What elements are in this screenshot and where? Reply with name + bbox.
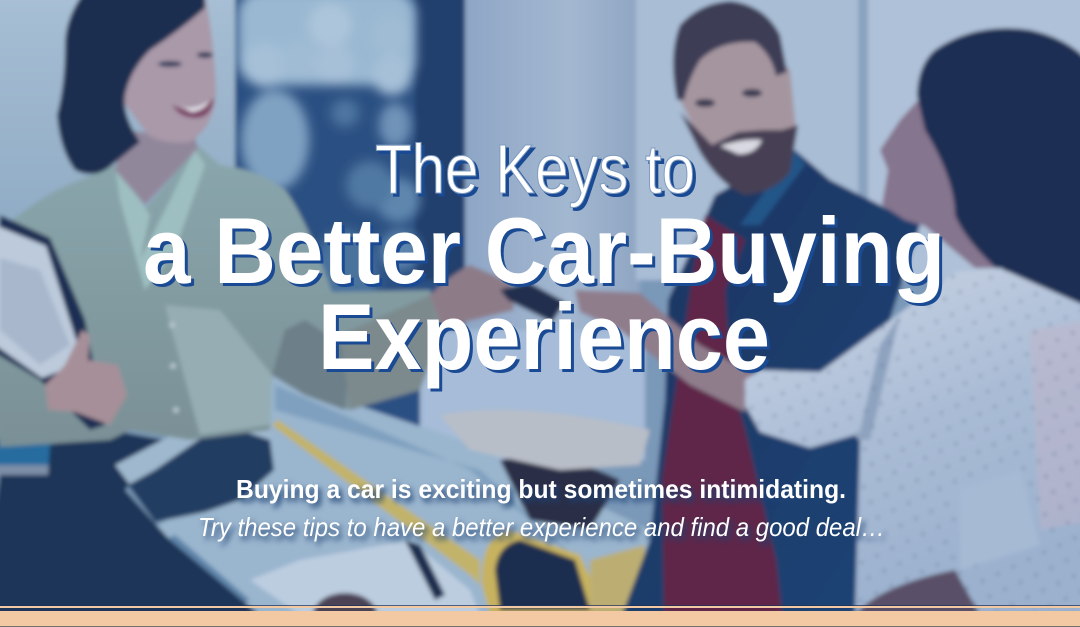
man: collar [740,150,805,225]
bottom peach band [0,605,1080,627]
background: bokeh lights [238,0,420,330]
clipboard [0,215,105,430]
right woman: curly hair [917,28,1080,320]
left woman: hair [57,0,205,174]
car: yellow door and window [440,410,650,615]
left woman: hand on clipboard [45,330,127,425]
right woman: dotted white blouse [745,268,1080,615]
title line 3: Experience: Experience [318,284,770,389]
left woman: dark lower body [0,415,274,615]
subtitle bold line: Buying a car is exciting but sometimes intimidating. [236,474,846,504]
title line 1: The Keys to: The Keys to [375,130,695,208]
subtitle italic line: Try these tips to have a better experience and find a good deal… [198,512,885,542]
title [143,130,945,389]
man: face, hair and beard [673,1,798,195]
title line 2: a Better Car-Buying: a Better Car-Buying [143,198,945,303]
man: red shirt [662,215,782,615]
right woman: face [880,98,995,268]
man: jacket [622,150,920,615]
left woman: neck and face [115,0,216,205]
car: hood [150,375,650,627]
left woman: shirt [0,145,443,447]
dark strip at lower left [0,438,100,475]
handshake: woman's hand and key fob [430,265,565,330]
right woman: arm [575,290,755,412]
subtitle [198,474,885,542]
